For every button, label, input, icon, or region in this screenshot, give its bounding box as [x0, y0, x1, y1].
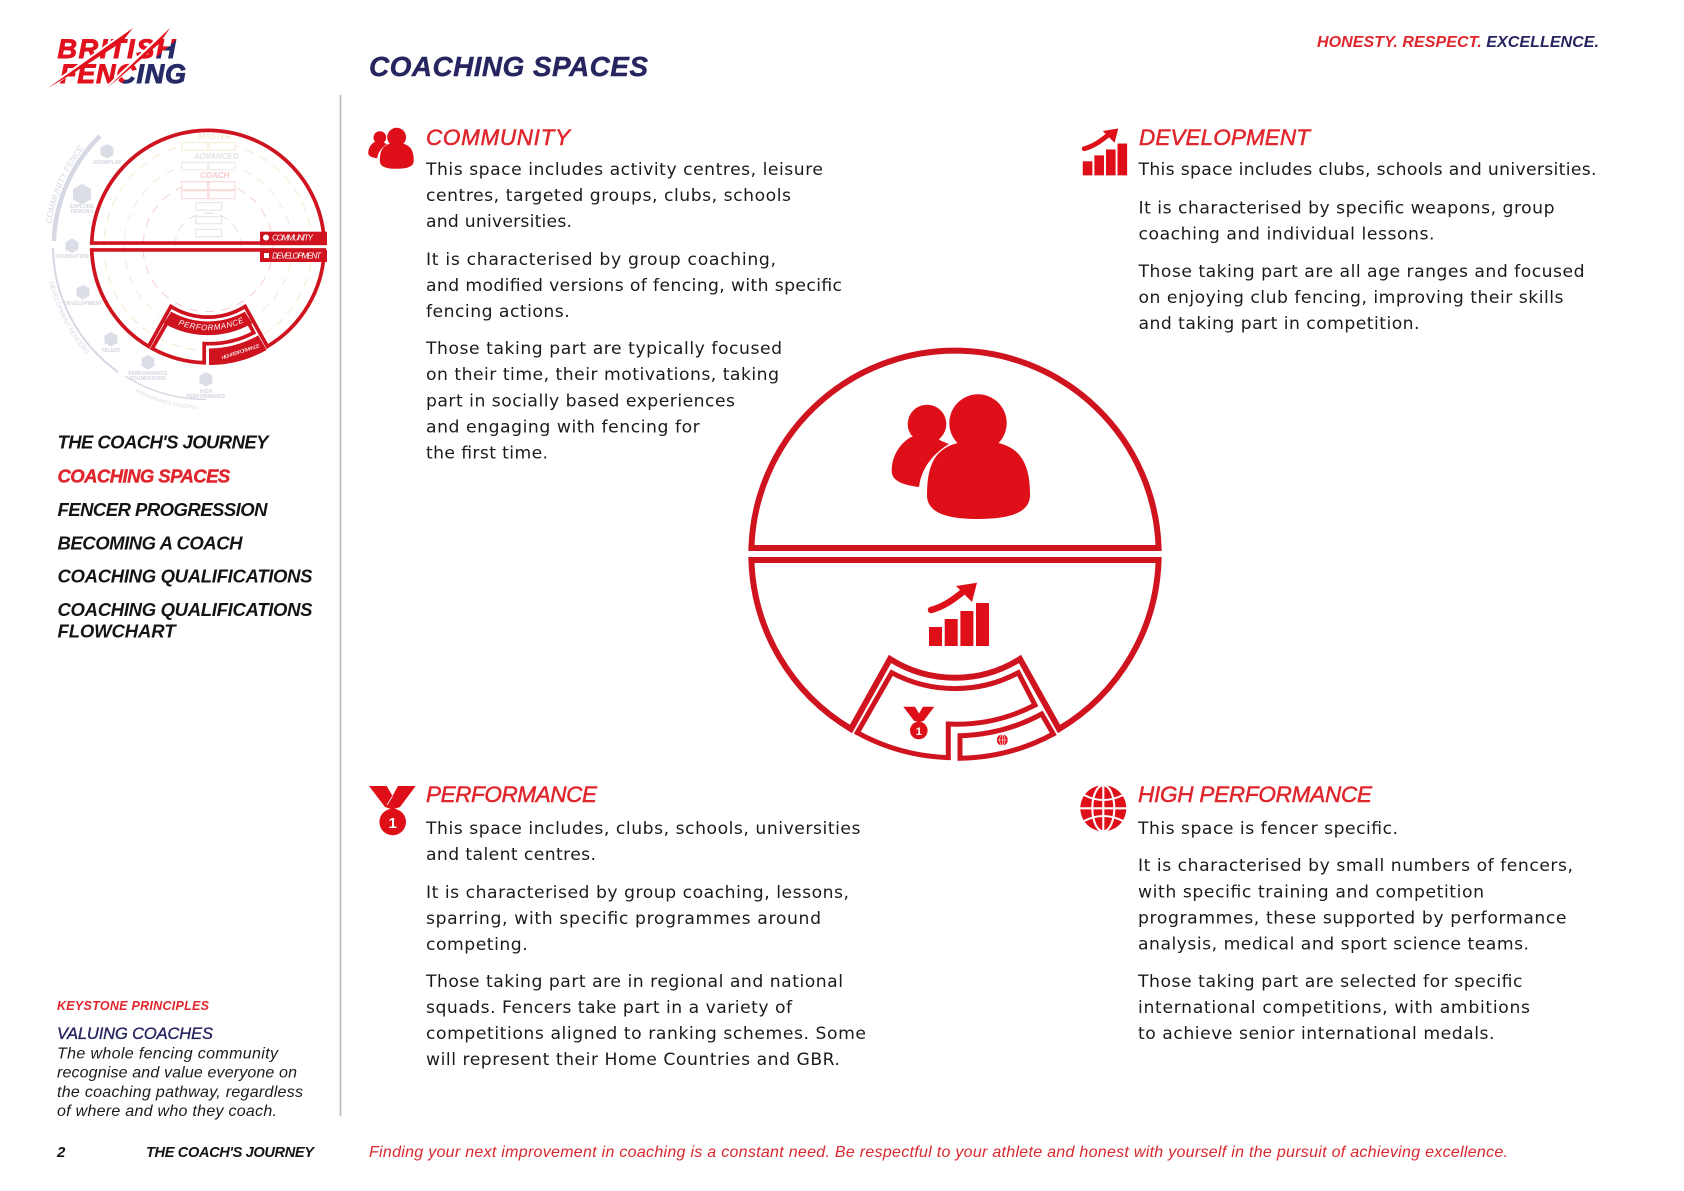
text block: and engaging with fencing for	[426, 418, 701, 438]
text block: fencing actions.	[426, 302, 570, 322]
footer: Finding your next improvement in coaching is a constant need. Be respectful to your athlete and honest with yourself in the pursuit of achieving excellence.	[369, 1144, 1508, 1161]
label: development	[260, 250, 327, 262]
text block: This space includes, clubs, schools, universities	[425, 819, 861, 839]
heading: DEVELOPMENT	[1139, 125, 1312, 150]
navigation menu: COACHING QUALIFICATIONS	[58, 599, 313, 620]
panel: high performance	[1080, 782, 1573, 1044]
lower half: development	[751, 560, 1159, 729]
keystone principles: KEYSTONE PRINCIPLES	[57, 999, 210, 1013]
text block: It is characterised by group coaching, lessons,	[426, 883, 849, 903]
icon: bar chart with arrow	[1083, 129, 1127, 175]
text block: sparring, with specific programmes around	[426, 909, 821, 929]
icon: medal: 1	[916, 726, 922, 738]
label: high performance: HIGH PERFORMANCE	[221, 343, 261, 361]
faded arc labels: PERFORMANCE FENCERS	[136, 389, 196, 409]
faded level labels: MASTER	[198, 132, 232, 141]
text block: and talent centres.	[426, 845, 596, 865]
faded badge labels: TALENT	[101, 348, 121, 354]
text block: competitions aligned to ranking schemes. Some	[426, 1024, 866, 1044]
logo: British Fencing: BRITISH	[58, 34, 176, 64]
heading: HIGH PERFORMANCE	[1138, 782, 1373, 807]
tagline: HONESTY. RESPECT. EXCELLENCE.	[1317, 34, 1599, 51]
navigation menu: COACHING SPACES	[58, 466, 231, 487]
faded hexagon badges	[66, 144, 212, 386]
icon: globe	[997, 734, 1008, 746]
text block	[425, 819, 866, 1070]
text block: the first time.	[426, 444, 548, 464]
label: performance: PERFORMANCE	[178, 317, 244, 330]
text block	[1137, 819, 1573, 1044]
text block: Those taking part are typically focused	[425, 339, 782, 359]
red coaching spaces outline	[92, 130, 324, 363]
navigation menu: FLOWCHART	[58, 620, 177, 642]
text block: This space includes activity centres, leisure	[425, 160, 823, 180]
faded badge labels: PERFORMANCE	[128, 371, 168, 377]
panel: performance	[369, 782, 866, 1070]
label: community: COMMUNITY	[272, 234, 314, 242]
faded badge labels	[56, 160, 226, 400]
mini diagram: coach's journey wheel	[46, 128, 327, 409]
faded level labels: ADVANCED	[193, 152, 239, 161]
faded level labels: COACH	[200, 171, 230, 180]
navigation menu: THE COACH'S JOURNEY	[58, 432, 270, 452]
keystone principles: recognise and value everyone on	[57, 1064, 297, 1082]
footer: THE COACH'S JOURNEY	[146, 1145, 315, 1161]
performance segment	[857, 673, 1035, 758]
central diagram: coaching spaces circle	[751, 351, 1159, 758]
icon: people	[368, 128, 414, 169]
logo: British Fencing	[48, 28, 186, 89]
icon: medal: 1	[389, 815, 397, 832]
icon: bar chart with arrow	[929, 583, 989, 646]
faded badge labels: FOUNDATION	[56, 254, 89, 260]
text block: and taking part in competition.	[1138, 314, 1420, 334]
faded level boxes	[182, 143, 235, 237]
faded badge labels: PERFORMANCE	[186, 394, 226, 400]
faded badge labels: EXPLORE	[70, 204, 95, 210]
label: community	[260, 232, 327, 245]
text block: and universities.	[426, 212, 572, 232]
text block: coaching and individual lessons.	[1138, 224, 1434, 244]
text block: It is characterised by specific weapons, group	[1138, 198, 1554, 218]
footer: 2	[56, 1144, 66, 1161]
keystone principles: of where and who they coach.	[57, 1103, 277, 1120]
title: COACHING SPACES	[369, 51, 648, 82]
panel: development	[1083, 125, 1596, 334]
text block: with specific training and competition	[1138, 882, 1484, 902]
heading: PERFORMANCE	[426, 782, 598, 807]
icon: people	[892, 394, 1030, 519]
faded badge labels: SHOWPLAY	[93, 160, 122, 166]
faded badge labels: HIGH	[200, 389, 213, 395]
navigation menu: BECOMING A COACH	[58, 532, 243, 553]
high performance segment	[960, 714, 1053, 758]
logo: British Fencing: FENCING	[60, 59, 186, 89]
keystone principles: VALUING COACHES	[57, 1025, 213, 1043]
text block: It is characterised by group coaching,	[426, 250, 776, 270]
keystone principles	[57, 999, 303, 1120]
text block: international competitions, with ambitions	[1138, 998, 1530, 1018]
text block: It is characterised by small numbers of fencers,	[1138, 856, 1573, 876]
heading: COMMUNITY	[426, 125, 572, 150]
text block	[425, 160, 842, 464]
text block: Those taking part are in regional and national	[425, 972, 843, 992]
faded badge labels: FENCING	[71, 209, 93, 215]
icon: medal	[903, 707, 934, 739]
text block: squads. Fencers take part in a variety of	[426, 998, 793, 1018]
navigation menu: COACHING QUALIFICATIONS	[58, 566, 313, 587]
text block: part in socially based experiences	[426, 392, 735, 412]
keystone principles: the coaching pathway, regardless	[57, 1084, 303, 1101]
navigation menu: FENCER PROGRESSION	[58, 499, 268, 520]
faded badge labels: FOUNDATIONS	[130, 376, 167, 382]
text block: programmes, these supported by performance	[1138, 908, 1566, 928]
faded fencer arcs	[53, 136, 206, 400]
text block: to achieve senior international medals.	[1138, 1024, 1494, 1044]
faded badge labels: DEVELOPMENT	[64, 301, 102, 307]
faded dashed rings	[104, 142, 312, 350]
label: development: DEVELOPMENT	[272, 252, 322, 260]
text block	[1138, 160, 1596, 334]
text block: Those taking part are all age ranges and focused	[1138, 262, 1584, 282]
icon: medal	[369, 786, 416, 835]
faded arc labels: DEVELOPMENT FENCERS	[50, 282, 89, 354]
text block: will represent their Home Countries and GBR.	[426, 1050, 840, 1070]
icon: globe	[1080, 785, 1127, 831]
faded level labels	[193, 132, 239, 180]
text block: analysis, medical and sport science teams.	[1138, 934, 1529, 954]
upper half: community	[751, 351, 1159, 548]
text block: and modified versions of fencing, with specific	[426, 276, 842, 296]
text block: on enjoying club fencing, improving their skills	[1138, 288, 1564, 308]
text block: This space is fencer specific.	[1137, 819, 1398, 839]
text block: on their time, their motivations, taking	[426, 365, 779, 385]
keystone principles: The whole fencing community	[57, 1046, 279, 1062]
panel: community	[368, 125, 842, 464]
text block: competing.	[426, 935, 528, 955]
faded arc labels	[46, 145, 196, 409]
text block: This space includes clubs, schools and universities.	[1138, 160, 1596, 180]
text block: centres, targeted groups, clubs, schools	[426, 186, 791, 206]
text block: Those taking part are selected for specific	[1137, 972, 1522, 992]
navigation menu	[58, 432, 313, 642]
